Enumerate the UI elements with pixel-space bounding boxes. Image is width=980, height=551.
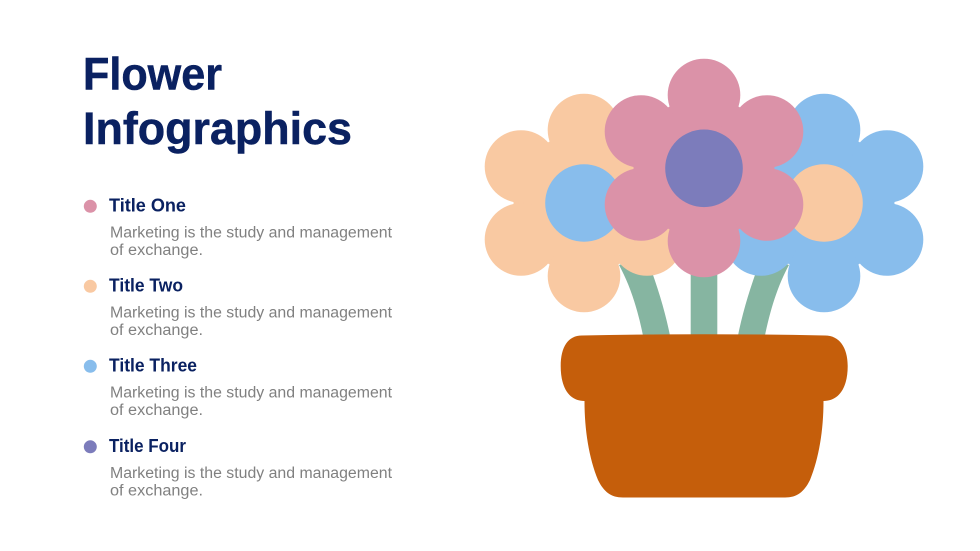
legend item: title one: Marketing is the study and management: [110, 224, 393, 242]
legend item: title one: [84, 194, 393, 259]
flower pot illustration: [485, 59, 923, 497]
flower: blue: [725, 94, 923, 312]
legend item: title four: Marketing is the study and management: [110, 465, 393, 482]
flower: peach: [485, 94, 683, 312]
legend item: title three: Title Three: [109, 354, 197, 376]
legend item: title four: Title Four: [109, 435, 186, 456]
title: Infographics: [83, 103, 352, 154]
legend item: title three: Marketing is the study and management: [110, 384, 393, 402]
legend item: title three: [84, 354, 393, 419]
legend item: title two: [84, 274, 393, 339]
legend item: title three: of exchange.: [110, 402, 203, 419]
title: Flower: [83, 48, 222, 100]
flower: pink: [605, 59, 803, 277]
legend item: title one: Title One: [109, 194, 186, 216]
legend item: title four: of exchange.: [110, 482, 203, 500]
legend list: [84, 194, 393, 500]
legend item: title two: Title Two: [109, 274, 183, 296]
legend item: title four: [84, 435, 393, 500]
pot: [561, 334, 848, 498]
legend item: title two: of exchange.: [110, 322, 203, 339]
legend item: title two: Marketing is the study and management: [110, 304, 393, 322]
stems: [619, 258, 789, 338]
legend item: title one: of exchange.: [110, 242, 203, 259]
title: [83, 48, 352, 154]
